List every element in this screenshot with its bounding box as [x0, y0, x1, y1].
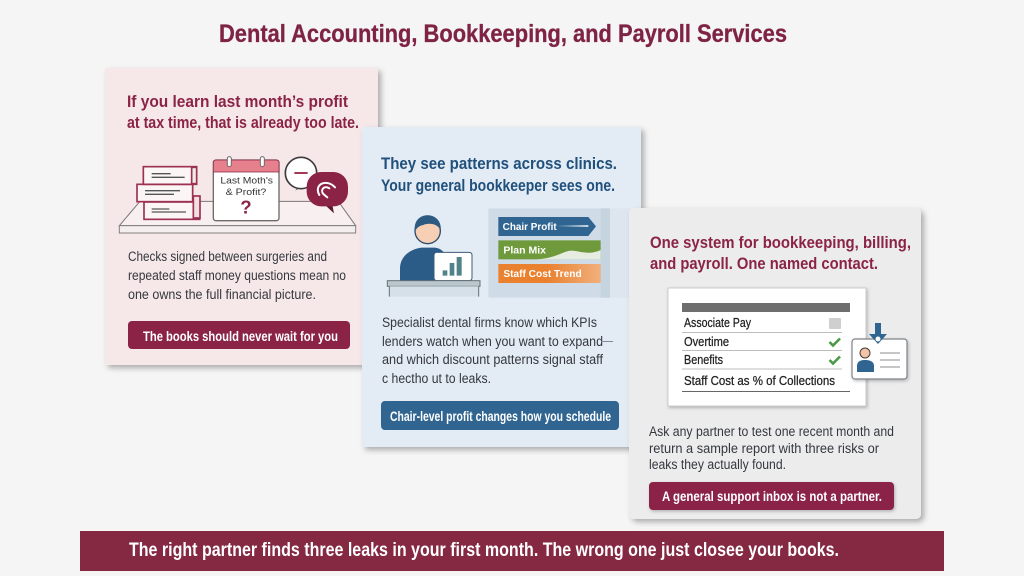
icon: calendar with question — [213, 157, 279, 221]
icon: white speech bubble — [285, 157, 317, 191]
icon: burgundy speech bubble — [307, 172, 348, 213]
button — [128, 321, 350, 349]
heading: at tax time, that is already too late. — [127, 113, 359, 132]
heading — [650, 233, 911, 273]
button: The books should never wait for you — [143, 328, 338, 344]
report sheet: Associate Pay — [684, 316, 752, 330]
icon: calendar with question: Last Moth's — [220, 176, 274, 186]
bar: chair profit — [498, 217, 596, 236]
button: A general support inbox is not a partner. — [662, 488, 882, 504]
heading: If you learn last month’s profit — [127, 92, 348, 111]
bar: plan mix: Plan Mix — [503, 245, 546, 256]
bar: plan mix — [498, 240, 601, 259]
panel: one system — [629, 208, 921, 519]
button: Chair-level profit changes how you schedule — [390, 408, 611, 424]
body text: repeated staff money questions mean no — [128, 268, 346, 283]
button — [649, 482, 894, 510]
panel: late profit — [105, 68, 378, 365]
card background — [105, 68, 378, 365]
body text: one owns the full financial picture. — [128, 287, 316, 302]
icon: ID badge with pin — [852, 323, 907, 379]
panel: patterns across clinics — [362, 127, 641, 447]
card background — [629, 208, 921, 519]
bottom banner — [80, 531, 944, 571]
heading: Your general bookkeeper sees one. — [381, 176, 615, 195]
bar: staff cost trend — [498, 264, 601, 283]
report sheet — [668, 288, 866, 406]
icon: stacked books — [137, 167, 200, 219]
report sheet: Overtime — [684, 335, 729, 349]
heading: They see patterns across clinics. — [381, 154, 617, 173]
illustration: person at laptop — [387, 215, 480, 297]
bottom banner: The right partner finds three leaks in your first month. The wrong one just closee your books. — [129, 540, 839, 561]
card background — [362, 127, 641, 447]
body text: and which discount patterns signal staff — [382, 352, 603, 367]
body text: Specialist dental firms know which KPIs — [382, 315, 597, 330]
body text: Ask any partner to test one recent month and — [649, 424, 894, 439]
body text — [649, 424, 894, 472]
body text: return a sample report with three risks or — [649, 441, 879, 456]
chart panel: KPI bars — [488, 208, 630, 298]
bar: staff cost trend: Staff Cost Trend — [503, 269, 582, 280]
report sheet: Benefits — [684, 353, 723, 367]
report sheet: Staff Cost as % of Collections — [684, 374, 835, 388]
body text: leaks they actually found. — [649, 457, 786, 472]
bar: chair profit: Chair Profit — [503, 222, 557, 233]
icon: calendar with question: & Profit? — [226, 187, 266, 197]
heading — [381, 154, 617, 195]
illustration: books, calendar and speech bubbles on a desk — [119, 157, 356, 233]
heading — [127, 92, 359, 132]
body text: Checks signed between surgeries and — [128, 249, 327, 264]
heading: and payroll. One named contact. — [650, 254, 878, 273]
heading: One system for bookkeeping, billing, — [650, 233, 911, 252]
button — [381, 401, 619, 430]
icon: calendar with question: ? — [240, 197, 252, 218]
title: Dental Accounting, Bookkeeping, and Payroll Services — [219, 20, 787, 48]
body text — [128, 249, 346, 302]
body text — [382, 315, 613, 386]
body text: lenders watch when you want to expand — [382, 334, 603, 349]
body text: c hectho ut to leaks. — [382, 371, 491, 386]
